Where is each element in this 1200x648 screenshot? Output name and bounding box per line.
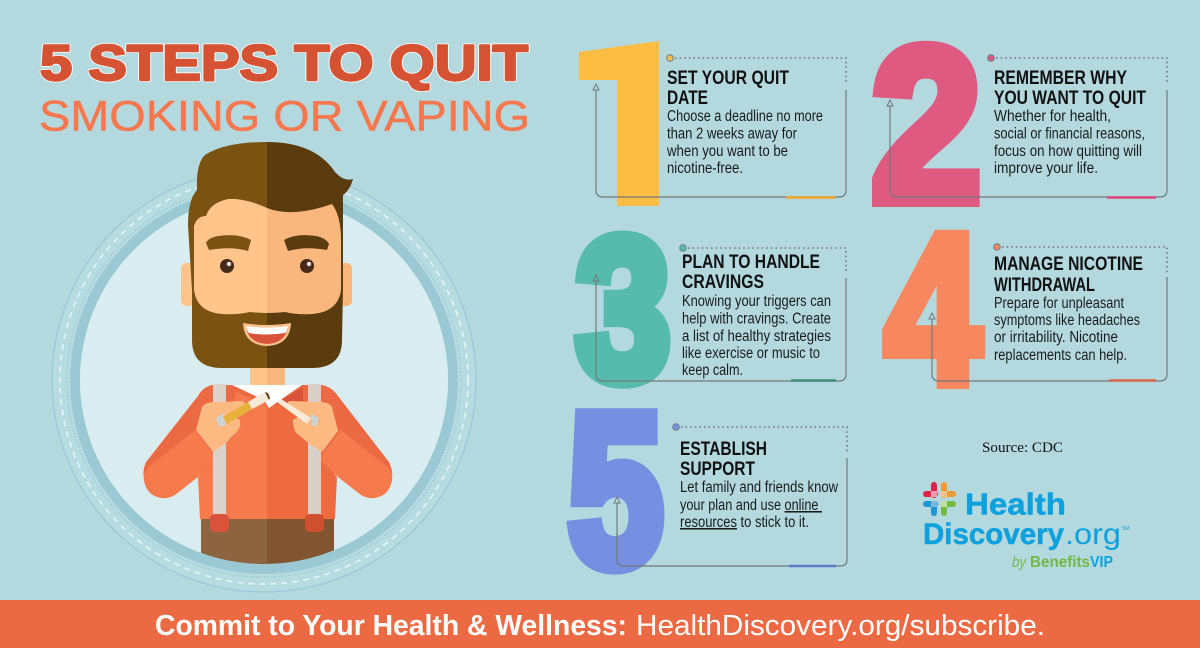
heading <box>682 252 820 293</box>
body text: social or financial reasons, <box>994 126 1145 142</box>
heading: SET YOUR QUIT <box>667 68 789 89</box>
body text: or irritability. Nicotine <box>994 329 1118 346</box>
frame <box>614 424 847 566</box>
body text: than 2 weeks away for <box>667 126 797 142</box>
heading: DATE <box>667 88 708 109</box>
footer banner: Commit to Your Health & Wellness: <box>155 610 627 642</box>
source note: Source: CDC <box>982 440 1063 456</box>
body text: Whether for health, <box>994 108 1111 125</box>
body text: like exercise or music to <box>682 345 820 362</box>
frame <box>887 55 1167 198</box>
body text: your plan and use online <box>680 497 822 514</box>
numeral 1 <box>579 41 659 206</box>
eyes <box>220 259 314 273</box>
body text: help with cravings. Create <box>682 310 831 328</box>
hair and beard <box>188 142 353 368</box>
ears <box>181 263 352 306</box>
body text <box>994 295 1140 364</box>
title: 5 STEPS TO QUIT <box>40 35 528 91</box>
heading: CRAVINGS <box>682 272 764 293</box>
heading <box>994 254 1143 296</box>
body text: resources to stick to it. <box>680 514 809 531</box>
heading: YOU WANT TO QUIT <box>994 88 1146 109</box>
pants <box>201 519 334 569</box>
footer banner <box>0 600 1200 648</box>
heading: WITHDRAWAL <box>994 275 1095 296</box>
body text: Prepare for unpleasant <box>994 295 1125 312</box>
logo: HealthDiscovery.org by BenefitsVIP: Benefits <box>1030 554 1090 571</box>
frame <box>593 245 846 381</box>
body text: Let family and friends know <box>680 479 839 496</box>
logo: HealthDiscovery.org by BenefitsVIP: .org <box>1065 518 1121 551</box>
title: SMOKING OR VAPING <box>39 92 530 140</box>
logo: HealthDiscovery.org by BenefitsVIP: VIP <box>1090 554 1113 571</box>
hands and broken cigarette <box>196 392 338 452</box>
body text: when you want to be <box>666 143 788 160</box>
logo: HealthDiscovery.org by BenefitsVIP: by <box>1012 554 1027 571</box>
illustration: bearded man breaking a cigarette <box>143 142 392 569</box>
body text: Choose a deadline no more <box>667 108 823 125</box>
body text: replacements can help. <box>994 347 1127 364</box>
eyebrows <box>206 235 329 251</box>
footer banner: HealthDiscovery.org/subscribe. <box>636 610 1045 642</box>
heading: ESTABLISH <box>680 439 767 460</box>
neck <box>250 366 285 388</box>
heading: SUPPORT <box>680 459 755 480</box>
body text: Knowing your triggers can <box>682 293 831 310</box>
logo: HealthDiscovery.org by BenefitsVIP: Health <box>965 486 1066 522</box>
body text <box>994 108 1145 177</box>
numeral 3: 3 <box>576 196 670 422</box>
body text: nicotine-free. <box>667 160 743 177</box>
icon: colored plus <box>923 482 956 516</box>
face <box>194 199 341 314</box>
step 1 panel <box>593 55 846 198</box>
logo: HealthDiscovery.org by BenefitsVIP: SM <box>1122 526 1130 532</box>
body text: a list of healthy strategies <box>682 328 831 345</box>
shirt and arms <box>143 385 392 519</box>
body text <box>682 293 831 379</box>
step 2 panel <box>887 55 1167 198</box>
collar <box>232 385 303 408</box>
circle badge <box>52 168 476 592</box>
step 3 panel <box>593 245 846 381</box>
title <box>39 35 530 140</box>
numeral 1: 1 <box>580 0 711 256</box>
numeral 2: 2 <box>872 4 981 247</box>
heading: REMEMBER WHY <box>994 68 1127 89</box>
step 4 panel <box>929 244 1167 381</box>
body text: focus on how quitting will <box>994 143 1142 160</box>
logo: HealthDiscovery.org by BenefitsVIP: Discovery <box>923 518 1064 551</box>
body text <box>680 479 839 531</box>
title: 5 STEPS TO QUIT <box>40 35 528 91</box>
heading: MANAGE NICOTINE <box>994 254 1143 275</box>
body text: improve your life. <box>994 160 1098 177</box>
numeral 5: 5 <box>568 370 663 612</box>
numeral 4: 4 <box>884 190 981 429</box>
heading <box>994 68 1146 109</box>
heading: PLAN TO HANDLE <box>682 252 820 273</box>
body text <box>666 108 823 177</box>
frame <box>929 244 1167 381</box>
body text: keep calm. <box>682 362 743 379</box>
logo: HealthDiscovery.org by BenefitsVIP <box>923 482 1130 571</box>
suspenders <box>210 384 324 532</box>
frame <box>593 55 846 198</box>
body text: symptoms like headaches <box>994 312 1140 329</box>
mouth <box>243 323 291 346</box>
step 5 panel <box>614 424 847 566</box>
heading <box>680 439 767 480</box>
heading <box>667 68 789 109</box>
